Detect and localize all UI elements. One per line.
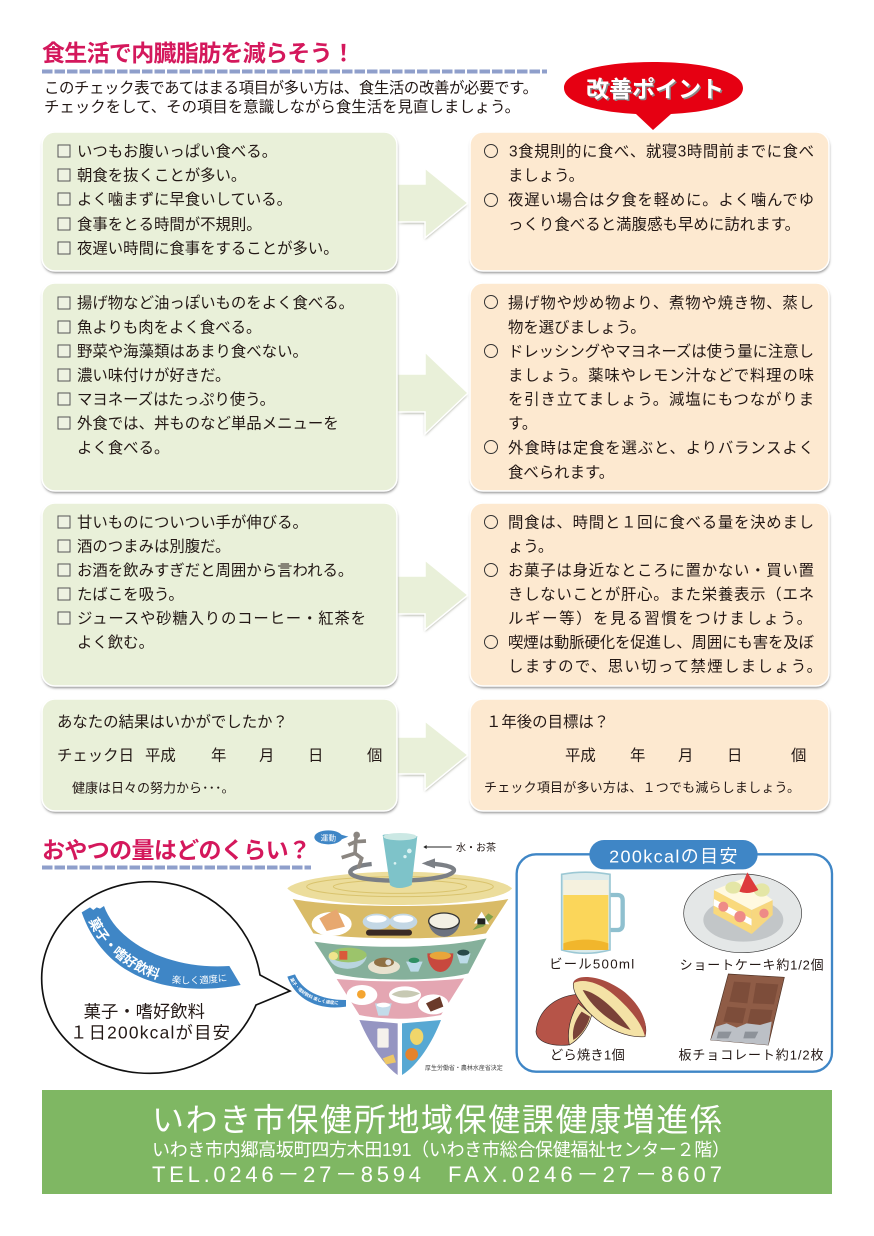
credit: 厚生労働省・農林水産省決定	[425, 1064, 503, 1072]
text: snack target	[70, 1001, 230, 1042]
panel: improvement advice 1: 3食規則的に食べ、就寝3時間前までに食べ	[509, 142, 814, 160]
icon: chocolate bar	[711, 974, 784, 1045]
panel: improvement advice 2: を引き立てましょう。減塩にもつながりま	[508, 390, 814, 408]
panel: your result: 個	[367, 746, 382, 764]
panel: improvement advice 1: ましょう。	[508, 168, 584, 184]
text: shortcake: ショートケーキ約1/2個	[680, 957, 824, 972]
panel: your result: 月	[259, 748, 274, 764]
wedge: fruit	[402, 1020, 441, 1075]
panel: checklist 3: よく飲む。	[77, 634, 154, 652]
footer: contact: TEL.0246－27－8594	[152, 1162, 421, 1187]
panel: improvement advice 2	[470, 283, 830, 493]
arrow: row 1	[397, 168, 468, 240]
panel: checklist 2: 魚よりも肉をよく食べる。	[77, 318, 261, 336]
panel: checklist 3: ジュースや砂糖入りのコーヒー・紅茶を	[77, 610, 366, 628]
panel: improvement advice 2: 外食時は定食を選ぶと、よりバランスよく	[508, 439, 814, 457]
panel: goal after one year: 個	[791, 746, 806, 764]
panel: improvement advice 2: 物を選びましょう。	[508, 318, 646, 336]
band: grains	[293, 899, 508, 938]
panel: improvement advice 2: ましょう。薬味やレモン汁などで料理の味	[508, 366, 814, 384]
panel: your result: 平成	[145, 746, 176, 764]
callout: improvement points: 改善ポイント	[588, 78, 726, 104]
panel: checklist 3: お酒を飲みすぎだと周囲から言われる。	[77, 562, 353, 580]
label: exercise: 運動	[321, 832, 336, 842]
speech bubble: snacks and drinks	[40, 880, 292, 1074]
panel: improvement advice 3: きしないことが肝心。また栄養表示（エネ	[508, 586, 814, 604]
footer: contact	[42, 1090, 832, 1194]
arrow: row 4	[397, 721, 468, 792]
panel: checklist 3: たばこを吸う。	[77, 586, 184, 604]
panel: goal after one year: 月	[678, 748, 693, 764]
panel: your result: 日	[308, 748, 323, 764]
food pyramid (spinning top)	[287, 830, 512, 1075]
label: water and tea	[423, 841, 496, 854]
panel: improvement advice 1	[470, 132, 830, 273]
text: beer: ビール500ml	[549, 956, 634, 971]
panel: checklist 1: いつもお腹いっぱい食べる。	[77, 142, 277, 160]
panel: your result: あなたの結果はいかがでしたか？	[57, 713, 288, 731]
intro text	[44, 79, 538, 116]
rotating arrow and runner	[342, 832, 454, 881]
panel: checklist 3	[42, 503, 398, 688]
panel: improvement advice 3: 間食は、時間と１回に食べる量を決めまし	[508, 514, 814, 532]
icon: shortcake	[684, 872, 802, 953]
panel: goal after one year: 日	[727, 748, 742, 764]
panel: goal after one year: １年後の目標は？	[486, 713, 609, 731]
panel: goal after one year: 平成	[565, 746, 596, 764]
panel: your result	[42, 699, 398, 813]
panel: improvement advice 3: ルギー等）を見る習慣をつけましょう。	[508, 610, 812, 628]
panel: your result: 健康は日々の努力から･･･。	[72, 780, 235, 796]
panel: improvement advice 1: 夜遅い場合は夕食を軽めに。よく噛んでゆ	[508, 191, 814, 209]
panel: improvement advice 3: ょう。	[508, 538, 553, 556]
panel: goal after one year: 年	[630, 746, 645, 764]
footer: contact: いわき市内郷高坂町四方木田191（いわき市総合保健福祉センター２階）	[152, 1140, 730, 1160]
intro text: このチェック表であてはまる項目が多い方は、食生活の改善が必要です。	[44, 79, 538, 97]
footer: contact: いわき市保健所地域保健課健康増進係	[152, 1102, 722, 1138]
panel: goal after one year: チェック項目が多い方は、１つでも減らしましょう。	[484, 780, 800, 795]
intro text: チェックをして、その項目を意識しながら食生活を見直しましょう。	[44, 98, 520, 116]
mini ribbon: confectionery: 菓子・嗜好飲料 楽しく適度に	[290, 978, 338, 1004]
water glass	[383, 833, 417, 888]
panel: checklist 2: 濃い味付けが好きだ。	[77, 366, 230, 384]
panel: improvement advice 3: 喫煙は動脈硬化を促進し、周囲にも害を及ぼ	[508, 634, 815, 652]
panel: checklist 3: 酒のつまみは別腹だ。	[77, 538, 230, 556]
icon: dorayaki	[536, 977, 646, 1045]
heading: reduce visceral fat: 食生活で内臓脂肪を減らそう！	[42, 40, 355, 66]
panel: improvement advice 3	[470, 503, 830, 688]
ribbon: confectionery label: 菓子・嗜好飲料	[88, 916, 160, 980]
text: chocolate: 板チョコレート約1/2枚	[678, 1047, 824, 1062]
panel: improvement advice 1: っくり食べると満腹感も早めに訪れます。	[508, 216, 800, 234]
callout: improvement points: 改善ポイント	[586, 76, 724, 102]
panel: checklist 1: 食事をとる時間が不規則。	[77, 216, 262, 234]
panel: checklist 1	[42, 132, 398, 273]
text: snack target: 菓子・嗜好飲料	[84, 1001, 205, 1021]
ribbon: confectionery label	[82, 906, 241, 989]
panel: improvement advice 2: す。	[508, 414, 537, 432]
panel: improvement advice 2: ドレッシングやマヨネーズは使う量に注意し	[508, 342, 814, 360]
panel: checklist 1: 朝食を抜くことが多い。	[77, 166, 246, 184]
icon: beer mug	[562, 872, 623, 953]
heading: snack amount: おやつの量はどのくらい？	[42, 837, 311, 863]
panel: checklist 2: 揚げ物など油っぽいものをよく食べる。	[77, 294, 354, 312]
panel: checklist 2: よく食べる。	[77, 439, 169, 457]
ribbon: confectionery label: 楽しく適度に	[172, 974, 226, 984]
panel: your result: チェック日	[57, 746, 134, 764]
panel: checklist 1: 夜遅い時間に食事をすることが多い。	[77, 240, 339, 258]
band: vegetables	[314, 938, 487, 980]
panel: checklist 1: よく噛まずに早食いしている。	[77, 190, 292, 208]
panel: improvement advice 3: お菓子は身近なところに置かない・買い置	[508, 562, 814, 580]
pill heading: 200kcalの目安	[609, 846, 737, 866]
label: exercise	[314, 830, 348, 844]
panel: improvement advice 3: しますので、思い切って禁煙しましょう。	[508, 658, 822, 676]
panel: your result: 年	[211, 746, 226, 764]
footer: contact: FAX.0246－27－8607	[448, 1162, 722, 1187]
pill heading	[589, 840, 758, 869]
panel: checklist 2: 外食では、丼ものなど単品メニューを	[77, 414, 339, 432]
panel: goal after one year	[470, 699, 830, 813]
panel: 200kcal guide	[517, 840, 832, 1072]
panel: improvement advice 2: 揚げ物や炒め物より、煮物や焼き物、蒸し	[508, 294, 814, 312]
disc: top of spinning top	[287, 872, 512, 905]
callout: improvement points	[564, 62, 743, 130]
panel: checklist 2: マヨネーズはたっぷり使う。	[77, 390, 275, 408]
wedge: dairy	[359, 1020, 398, 1075]
text: dorayaki: どら焼き1個	[550, 1047, 625, 1062]
panel: checklist 2	[42, 283, 398, 493]
panel: improvement advice 2: 食べられます。	[508, 464, 614, 482]
panel: checklist 3: 甘いものについつい手が伸びる。	[77, 514, 308, 532]
panel: checklist 2: 野菜や海藻類はあまり食べない。	[77, 342, 308, 360]
band: fish, meat, eggs	[337, 978, 464, 1019]
text: snack target: １日200kcalが目安	[70, 1022, 230, 1042]
label: water and tea: 水・お茶	[456, 841, 496, 854]
arrow: row 2	[397, 352, 468, 436]
arrow: row 3	[397, 560, 468, 632]
